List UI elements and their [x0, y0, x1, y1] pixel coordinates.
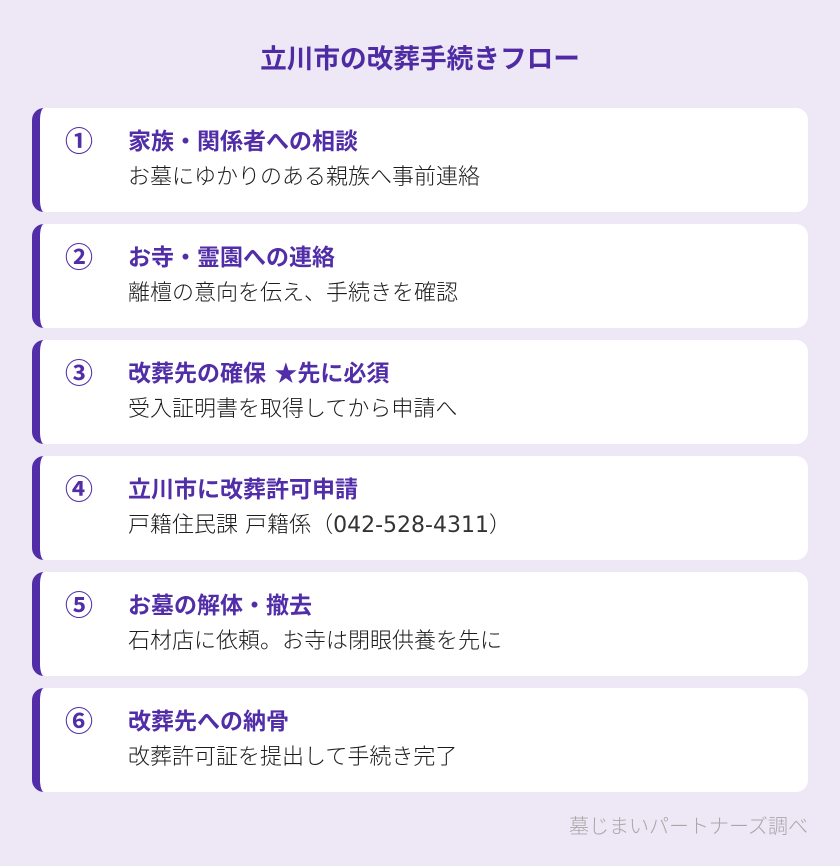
- step 5 heading: お墓の解体・撤去: [128, 592, 312, 618]
- panel: step 1: [32, 108, 808, 212]
- panel: step 4: [32, 456, 808, 560]
- panel: step 2: [32, 224, 808, 328]
- step 3 number: ③: [65, 358, 93, 389]
- source note: 墓じまいパートナーズ調べ: [569, 816, 808, 838]
- step 2 description: 離檀の意向を伝え、手続きを確認: [128, 280, 458, 305]
- step 3 heading: 改葬先の確保 ★先に必須: [128, 360, 389, 386]
- step 4 heading: 立川市に改葬許可申請: [128, 476, 358, 502]
- step 1 number: ①: [65, 126, 93, 157]
- step 6 description: 改葬許可証を提出して手続き完了: [128, 744, 457, 769]
- step 4 description: 戸籍住民課 戸籍係（042-528-4311）: [128, 512, 511, 538]
- step 1 heading: 家族・関係者への相談: [128, 128, 358, 154]
- panel: step 3: [32, 340, 808, 444]
- step 2 heading: お寺・霊園への連絡: [128, 244, 335, 270]
- step 2 number: ②: [65, 242, 93, 273]
- step 4 number: ④: [65, 474, 93, 505]
- step 3 description: 受入証明書を取得してから申請へ: [128, 396, 457, 421]
- step 6 number: ⑥: [65, 706, 93, 737]
- step 1 description: お墓にゆかりのある親族へ事前連絡: [128, 164, 480, 189]
- step 5 description: 石材店に依頼。お寺は閉眼供養を先に: [128, 628, 502, 653]
- panel: step 5: [32, 572, 808, 676]
- title: 立川市の改葬手続きフロー: [260, 44, 580, 74]
- panel: step 6: [32, 688, 808, 792]
- step 6 heading: 改葬先への納骨: [128, 708, 289, 734]
- step 5 number: ⑤: [65, 590, 93, 621]
